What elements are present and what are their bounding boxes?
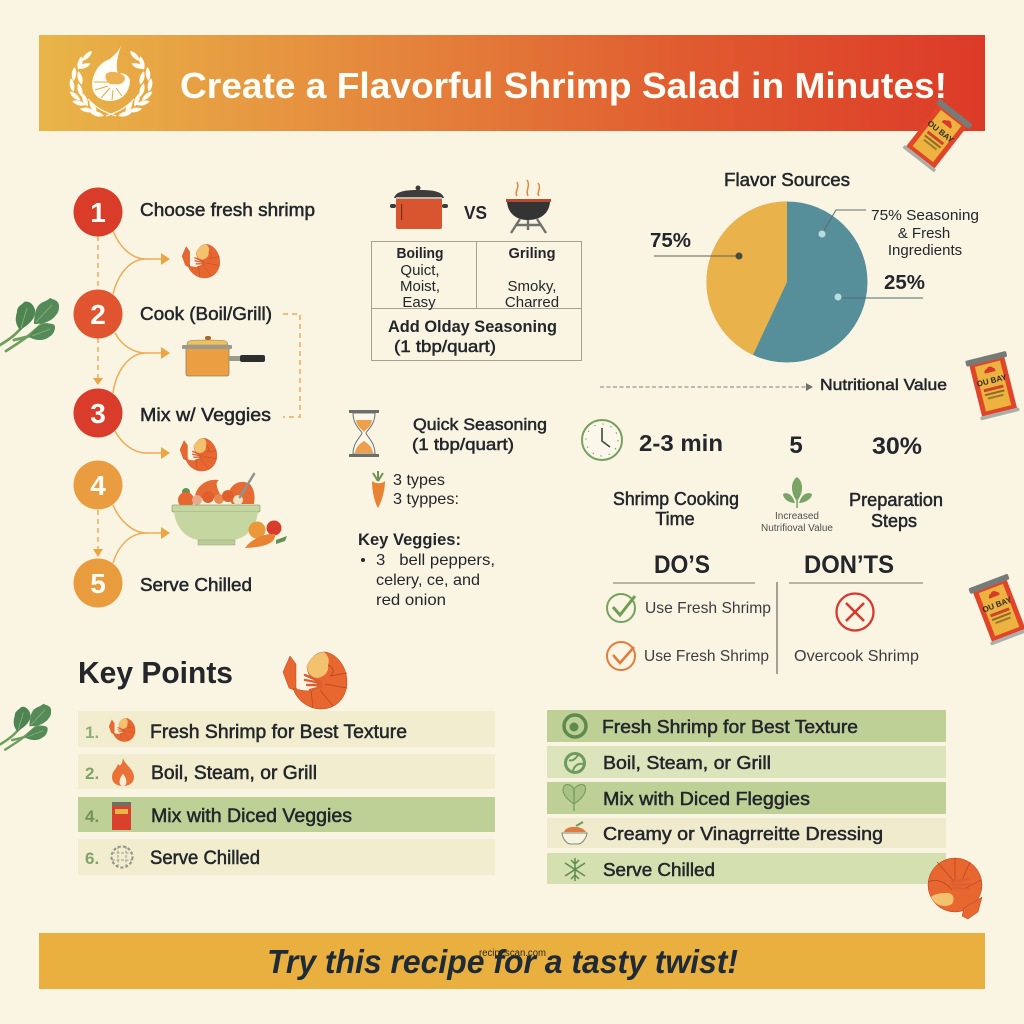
do's and don'ts: Overcook Shrimp [794,648,919,665]
seasoning can: lower right: OU BAY [981,595,1013,615]
quick seasoning block [349,410,547,609]
key veggies list: red onion [376,592,446,609]
icon: hourglass [349,410,379,457]
row 4 [547,818,946,848]
footer banner [39,933,985,989]
row 3: 4. [85,807,99,826]
callout: seasoning and fresh ingredients: 75% Seasoning [871,207,979,224]
icon: salad bowl [172,474,287,548]
step 1 [74,188,315,236]
stats row: Preparation [849,490,943,510]
icon: red cross [836,594,874,630]
icon: saucepan [182,336,265,376]
icon: shrimp laurel logo [68,43,154,118]
key points left list [78,711,495,875]
icon: orange check [607,642,635,670]
comparison table: Charred [505,294,559,311]
row 4 [78,839,495,875]
comparison table: Smoky, [508,278,556,295]
icon: clock [582,420,622,460]
icon: grill [506,180,551,233]
callout: 25%: 25% [884,272,925,294]
row 4: 6. [85,849,99,868]
key veggies list [358,530,495,609]
seasoning can: lower right [968,574,1024,646]
comparison table [372,242,582,360]
step 1: Choose fresh shrimp [140,200,315,220]
callout: 75%: 75% [650,230,691,252]
icon: red pot [390,186,448,229]
stats row: Time [655,509,695,529]
row 2: Boil, Steam, or Grill [603,753,771,773]
step 2 [74,290,272,338]
row 5 [547,853,946,884]
row 4: Serve Chilled [150,848,260,869]
callout: 25% [834,272,925,300]
key points heading: Key Points [78,655,233,690]
do's and don'ts: Use Fresh Shrimp [645,600,771,617]
flow connectors [93,231,300,563]
title: Create a Flavorful Shrimp Salad in Minutes! [180,65,947,106]
stats row: 5 [789,432,803,459]
do's and don'ts: Use Fresh Shrimp [644,648,769,665]
comparison table: Griling [508,245,556,262]
vs label: VS [464,203,487,223]
nutritional value arrow and label [600,377,947,394]
step 5 [74,558,252,608]
step 2: 2 [90,299,106,330]
comparison table: Boiling [396,245,444,262]
seasoning can: middle right: OU BAY [976,372,1008,389]
comparison table: Quict, [400,262,440,279]
comparison table: Add Olday Seasoning [388,317,557,336]
stats row: 30% [872,433,922,460]
do's and don'ts: DO’S [654,551,710,579]
seasoning can: middle right [965,351,1021,421]
row 2: 2. [85,764,99,783]
callout: seasoning and fresh ingredients [818,207,979,259]
do's and don'ts: DON’TS [804,551,894,579]
row 3: Mix with Diced Veggies [151,806,352,827]
stats row: Steps [871,511,917,531]
step 2: Cook (Boil/Grill) [140,304,272,324]
watermark: recipescan.com [479,948,546,959]
comparison table: (1 tbp/quart) [394,337,496,356]
row 1 [547,710,946,742]
icon: carrot [372,471,385,508]
row 3: Mix with Diced Fleggies [603,789,810,809]
process steps flow [74,188,315,608]
row 4: Creamy or Vinagrreitte Dressing [603,824,883,844]
row 2 [78,754,495,789]
stats row: 2-3 min [639,430,723,456]
stats row [582,420,943,534]
comparison table: Moist, [400,278,440,295]
icon: large shrimp [283,652,347,709]
step 4: 4 [90,470,106,501]
step 3: Mix w/ Veggies [140,405,271,425]
quick seasoning block: 3 typpes: [393,491,459,508]
callout: 75% [650,230,742,260]
row 1: Fresh Shrimp for Best Texture [150,722,407,743]
row 2 [547,746,946,778]
footer banner: Try this recipe for a tasty twist! [267,943,738,980]
key points right list [547,710,946,884]
row 3 [78,797,495,832]
row 1 [78,711,495,747]
callout: seasoning and fresh ingredients: Ingredients [888,242,962,259]
step 5: Serve Chilled [140,575,252,595]
quick seasoning block: (1 tbp/quart) [412,435,514,454]
seasoning can: top right: OU BAY [926,119,956,145]
header banner [39,35,985,131]
stats row: Nutrifioval Value [761,523,833,534]
icon: parsley upper [0,298,59,351]
flavor sources chart [650,170,979,362]
step 1: 1 [90,197,106,228]
stats row: Shrimp Cooking [613,489,739,509]
icon: green check [607,594,635,622]
step 4 [74,460,122,510]
step 5: 5 [90,568,106,599]
seasoning can: top right [902,99,973,173]
flavor sources chart: Flavor Sources [724,170,850,190]
row 1: Fresh Shrimp for Best Texture [602,717,858,737]
icon: nutrition leaf [783,477,812,508]
nutritional value arrow and label: Nutritional Value [820,377,947,394]
key veggies list: celery, ce, and [376,572,480,589]
row 3 [547,782,946,814]
boiling vs grilling comparison [372,180,582,360]
key veggies list: Key Veggies: [358,530,461,549]
do's and don'ts [607,551,923,674]
icon: shrimp step 3 [180,438,217,471]
row 5: Serve Chilled [603,860,715,880]
icon: parsley lower [0,704,51,750]
step 3 [74,388,271,438]
key veggies list: 3 bell peppers, [376,552,495,569]
stats row: Increased [775,511,819,522]
row 2: Boil, Steam, or Grill [151,763,317,784]
comparison table: Easy [402,294,436,311]
callout: seasoning and fresh ingredients: & Fresh [898,225,950,242]
icon: bottom right shrimp [928,858,982,919]
row 1: 1. [85,723,99,742]
quick seasoning block: 3 types [393,472,445,489]
quick seasoning block: Quick Seasoning [413,415,547,434]
step 3: 3 [90,398,106,429]
icon: shrimp step 1 [182,244,220,278]
pie chart [706,201,868,362]
